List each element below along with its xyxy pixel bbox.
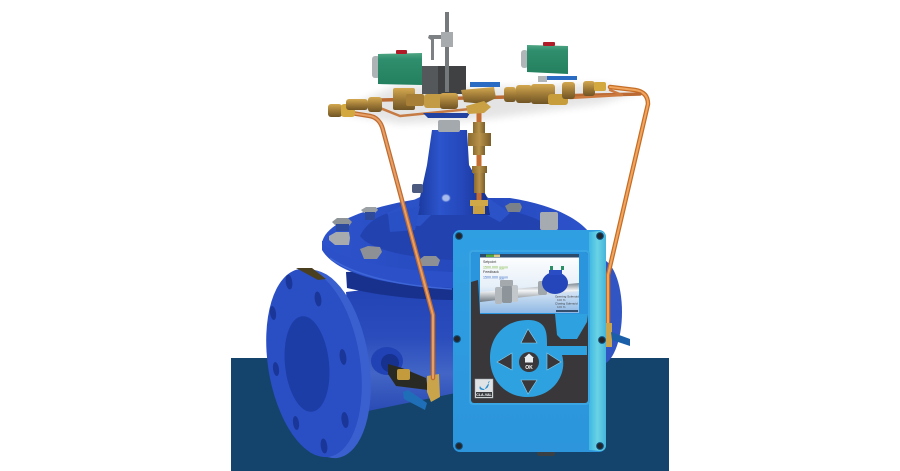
keypad swoosh (490, 320, 587, 397)
screen mini valve (542, 272, 568, 294)
bolt (360, 246, 382, 259)
brand logo (475, 379, 493, 398)
enclosure right side (589, 231, 606, 451)
up button (521, 329, 537, 343)
logo mark (480, 381, 490, 390)
blue handle (403, 390, 427, 410)
screen background (480, 254, 579, 313)
display screen (480, 254, 579, 313)
screen surround (471, 252, 588, 314)
right button (547, 353, 561, 370)
cover top surface (322, 198, 600, 272)
display notch (555, 314, 588, 339)
rod clamp (441, 32, 453, 47)
display screen: 1500.000 ggpm (483, 266, 508, 270)
display screen: Feedback (483, 270, 499, 274)
fitting plug on cover (540, 212, 558, 230)
right solenoid (521, 42, 568, 74)
coil (527, 45, 568, 74)
brand logo: CLA-VAL (476, 393, 493, 397)
enclosure bottom nub (537, 450, 555, 456)
screen readouts: Setpoint (483, 260, 496, 264)
right copper tube (608, 87, 648, 328)
steel switch (538, 76, 547, 82)
port boss (371, 347, 403, 375)
flange face (254, 262, 374, 464)
brass elbow (427, 374, 440, 402)
pilot assembly (328, 12, 630, 347)
keypad buttons (497, 329, 561, 394)
tee at riser (466, 101, 491, 114)
right lever handle (611, 332, 630, 346)
screen solenoid labels: Opening Solenoid (555, 294, 579, 298)
inlet flange (254, 262, 383, 465)
neck stem nut (438, 120, 460, 132)
display screen: 1500.000 ggpm (483, 276, 508, 280)
controller enclosure (453, 230, 606, 456)
right return tube (570, 90, 622, 98)
home icon (524, 354, 534, 362)
body main casting (346, 262, 612, 411)
indicator (543, 42, 555, 46)
logo wordmark (476, 392, 492, 397)
display screen: 100 % (557, 305, 566, 309)
lower cover flange (346, 262, 600, 300)
cover raised dome (360, 210, 562, 260)
center fittings (424, 94, 444, 108)
flange bore (280, 314, 334, 414)
bolt (412, 184, 423, 193)
body right end (578, 259, 622, 365)
riser fittings (468, 122, 491, 214)
drain port and ball valve (371, 347, 440, 410)
left solenoid (372, 50, 422, 85)
soft shadow behind manifold (335, 84, 640, 124)
solenoid base (393, 88, 415, 110)
actuator rod (445, 12, 449, 92)
down button (521, 380, 537, 394)
copper tubing (345, 87, 648, 378)
coil cap (372, 56, 380, 78)
navy base panel (231, 358, 669, 471)
brass fittings (328, 81, 606, 117)
flange thickness (263, 263, 383, 465)
right tube terminal fitting (606, 323, 612, 347)
flange nameplate (296, 268, 326, 280)
ball valve body (388, 364, 428, 390)
blue mounting plate (423, 113, 470, 118)
riser copper tube (476, 112, 482, 210)
logo tile (475, 379, 493, 398)
dark actuator box (422, 66, 466, 94)
enclosure shell (453, 230, 606, 452)
indicator (396, 50, 407, 54)
OK label: OK (525, 365, 533, 371)
enclosure screws (454, 233, 605, 449)
bolt (419, 256, 440, 266)
flange bolt holes (269, 274, 350, 454)
left button (497, 353, 512, 370)
coil cap (521, 50, 528, 68)
bolt (332, 218, 352, 231)
cover bolts (329, 184, 558, 266)
blue lever handles (470, 76, 577, 87)
recessed panel frame (469, 250, 590, 405)
cover flange rim (322, 225, 600, 288)
display screen: Closing Solenoid (555, 302, 578, 306)
bolt (329, 232, 350, 245)
valve body (322, 120, 622, 411)
coil (378, 53, 422, 85)
bolt (505, 203, 522, 212)
status bar (480, 254, 579, 258)
left copper tube (345, 112, 433, 378)
display screen: 100 % (557, 298, 566, 302)
neck (418, 130, 490, 215)
screen pipeline image (480, 283, 579, 302)
bolt (361, 207, 378, 220)
home OK button (519, 352, 539, 372)
rod arm (428, 35, 441, 60)
left fittings (328, 104, 342, 117)
right fittings (504, 87, 516, 102)
rib (388, 206, 420, 232)
upper manifold tube (380, 108, 470, 116)
